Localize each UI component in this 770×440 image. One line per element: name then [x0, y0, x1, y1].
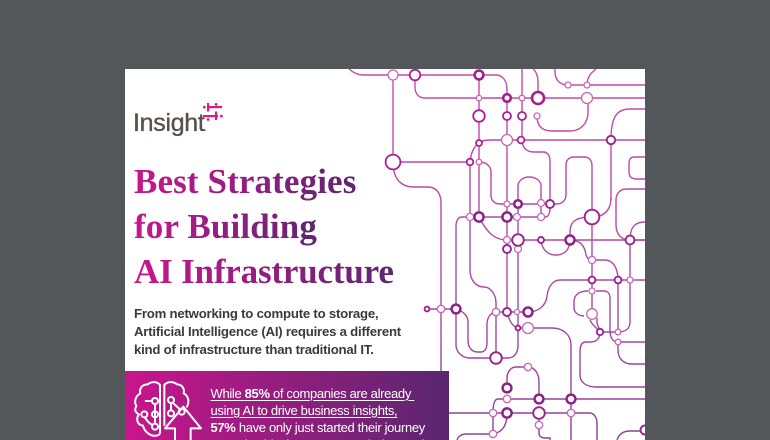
- statistic text: using AI to drive business insights,: [210, 402, 397, 418]
- intro text: From networking to compute to storage,: [134, 306, 378, 320]
- node light: [388, 70, 633, 438]
- title: Best Strategies: [134, 162, 356, 201]
- statistic text: [210, 386, 429, 440]
- intro text: Artificial Intelligence (AI) requires a different: [134, 324, 401, 339]
- panel: statistic band: [125, 371, 449, 440]
- logo: Insight: [133, 103, 223, 137]
- statistic text: 57% have only just started their journey: [210, 420, 425, 434]
- node dark: [386, 70, 526, 169]
- intro text: [134, 306, 401, 357]
- icon: logo mark: [203, 103, 223, 121]
- logo: Insight: Insight.: [133, 109, 206, 137]
- panel: white infographic sheet: [125, 69, 645, 440]
- icon: brain with upward arrow: [134, 381, 202, 440]
- circuit network illustration: [348, 69, 645, 440]
- statistic text: While 85% of companies are already: [210, 386, 411, 400]
- intro text: kind of infrastructure than traditional IT.: [134, 342, 374, 357]
- title: [134, 162, 394, 291]
- title: for Building: [134, 207, 317, 246]
- title: AI Infrastructure: [134, 252, 394, 291]
